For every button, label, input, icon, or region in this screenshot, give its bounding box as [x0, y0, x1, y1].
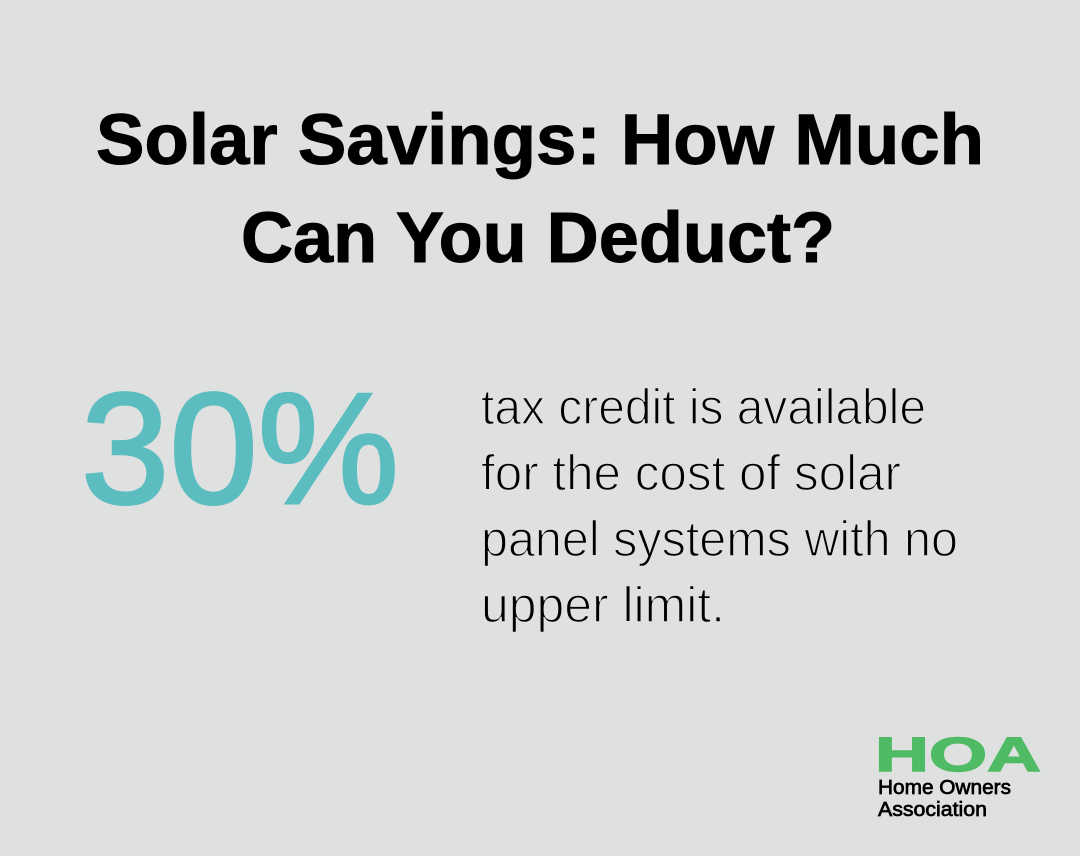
description text [481, 379, 958, 633]
logo wordmark: Association [878, 799, 987, 821]
title: Can You Deduct? [241, 199, 835, 278]
title: Solar Savings: How Much [96, 101, 984, 180]
logo wordmark [878, 777, 1011, 821]
description text: tax credit is available [481, 379, 926, 435]
description text: for the cost of solar [481, 445, 901, 501]
description text: panel systems with no [481, 511, 958, 567]
logo wordmark: Home Owners [878, 777, 1011, 799]
logo: Home Owners Association [875, 729, 1041, 821]
logo mark: HOA: HOA [875, 729, 1041, 782]
description text: upper limit. [481, 577, 725, 633]
title [96, 101, 984, 278]
big statistic: 30%: 30% [81, 361, 399, 537]
